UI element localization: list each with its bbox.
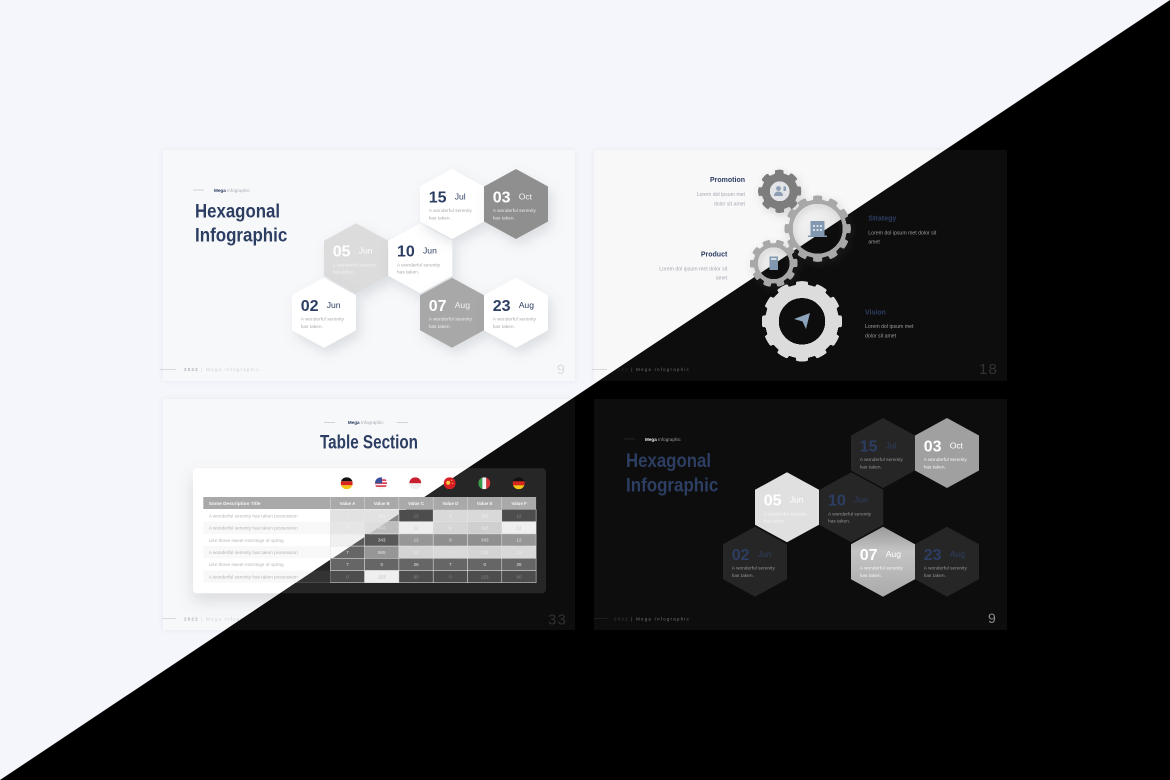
cell values: 343 [481,513,489,518]
heading: Infographic [626,474,718,496]
cell values: 90 [516,574,522,579]
hexagon 02 Jun: has taken. [301,324,323,330]
hexagon 05 Jun [324,223,388,293]
cell values: 26 [414,562,419,567]
promotion text: dolor sit amet [714,201,746,207]
hexagon 03 Oct: 03 [924,438,942,455]
hexagon 23 Aug [915,527,979,597]
slide card [163,150,575,381]
hexagon 10 Jun: has taken. [828,519,850,525]
row labels: A wonderful serenity has taken possession [209,513,298,519]
panel: light side of table slide [162,399,575,630]
hexagon 02 Jun: Jun [758,549,772,559]
cell values: 343 [378,513,386,518]
row labels: A wonderful serenity has taken possession [209,526,298,532]
cell values: 90 [414,574,419,579]
header row: Value B [374,501,390,506]
eyebrow: Mega Infographic [214,188,250,193]
hexagon 05 Jun: A wonderful serenity [764,511,807,517]
cell values [346,513,522,579]
footer: 2022 | Mega Infographic [184,367,260,372]
gear: vision [764,284,840,359]
table slide dark card [225,399,575,630]
heading: Infographic [195,225,287,247]
hexagon 03 Oct: has taken. [493,215,515,221]
hexagon 23 Aug: 23 [493,298,511,315]
cell values: 12 [414,526,419,530]
vision text [865,309,914,340]
flags row [341,477,525,489]
value cells [330,510,536,583]
hexagon 05 Jun: Jun [790,495,804,505]
hexagon 07 Aug: has taken. [860,573,882,579]
hexagon 10 Jun: A wonderful serenity [828,511,872,517]
hexagon 10 Jun [388,223,452,293]
hexagon 03 Oct: has taken. [924,464,946,470]
cell values: 343 [481,538,489,543]
hexagon 07 Aug: Aug [455,300,470,310]
flag: Indonesia [409,477,421,489]
cell values: 7 [346,550,349,555]
hexagon 07 Aug: A wonderful serenity [860,566,903,572]
gear holes light [757,203,843,280]
cell values: 0 [381,562,384,567]
header row [203,497,536,509]
header row: Value E [477,501,493,506]
table panel dark [280,468,546,594]
hexagon 15 Jul [851,418,915,488]
hexagon 03 Oct: Oct [519,191,533,201]
header row: Value F [511,501,527,506]
cell values: 7 [449,562,452,567]
hexagon 03 Oct: A wonderful serenity [924,457,967,463]
hexagon 15 Jul: has taken. [429,215,451,221]
hexagon 15 Jul: has taken. [860,464,882,470]
cell values: 12 [516,513,522,518]
table panel [188,468,467,606]
panel: dark side overlays [163,150,1007,630]
hexagon 05 Jun [755,472,819,542]
page number: 9 [557,361,565,377]
hexagon 10 Jun: Jun [854,495,868,505]
hexagon 05 Jun: 05 [333,244,351,261]
vision text: Lorem dol ipsum met [865,324,914,330]
row labels: Like those sweet mornings of spring [209,538,284,544]
gears slide footer: 2022 | Mega Infographic [614,367,690,372]
hexagon 07 Aug: 07 [429,298,447,315]
cell values: 9 [449,526,452,530]
hexagon 15 Jul: Jul [886,440,897,450]
cell values: 343 [481,550,489,555]
cell values: 12 [516,550,522,555]
heading: Hexagonal [195,200,280,222]
hexagon 10 Jun: A wonderful serenity [397,262,441,268]
header row: Value A [340,501,356,506]
flag: Italy [478,477,490,489]
hexagon 15 Jul: 15 [429,189,447,206]
hexagon 07 Aug: has taken. [429,324,451,330]
cell values: 7 [346,526,349,530]
vision text: Vision [865,309,886,316]
hexagon 10 Jun: Jun [423,246,437,256]
hexagon 05 Jun: has taken. [333,270,355,276]
cell values: 343 [378,526,386,530]
header row: Value C [408,501,425,506]
hexagon 02 Jun: A wonderful serenity [301,317,344,323]
icon: navigation arrow [794,313,810,329]
gear: promotion [761,172,799,210]
strategy text: Lorem dol ipsum met dolor sit [868,230,937,236]
vision text: dolor sit amet [865,334,897,340]
hexagon 07 Aug: Aug [886,549,901,559]
hexagon 05 Jun: has taken. [764,519,786,525]
header row: Value D [442,501,458,506]
hexagon 07 Aug: 07 [860,547,878,564]
hexagon 05 Jun: Jun [359,246,373,256]
cell values: 0 [346,574,349,579]
hexagon 02 Jun: has taken. [732,573,754,579]
cell values: 12 [414,550,419,555]
gear holes dark [761,219,842,279]
hexagon 03 Oct [915,418,979,488]
strategy text: amet [868,240,880,246]
header row: Some Description Title [209,501,261,507]
page number 33: 33 [548,611,567,628]
hexagon 07 Aug: A wonderful serenity [429,317,472,323]
flag: USA [375,477,387,489]
table [203,477,536,583]
hexagon 03 Oct [484,169,548,239]
slide card [225,399,572,630]
flag: China [444,477,456,489]
hexagon 07 Aug [851,527,915,597]
hexagon 07 Aug [420,278,484,348]
icon: calculator [770,256,778,270]
hexagon 23 Aug: has taken. [924,573,946,579]
cell values: 7 [346,513,349,518]
panel: light hexagonal slide [160,150,575,381]
promotion text [697,177,746,207]
cell values: 12 [516,526,522,530]
hexagon 23 Aug [484,278,548,348]
hexagon 02 Jun: 02 [301,298,319,315]
product text: Lorem dol ipsum met dolor sit [659,266,728,272]
slide card [598,150,945,381]
footer: 2022 | Mega Infographic [614,616,690,622]
footer: 2022 | Mega Infographic [184,616,260,622]
eyebrow: Mega Infographic [645,437,681,442]
cell values: 565 [378,550,386,555]
hexagon 10 Jun [819,472,883,542]
hexagon 15 Jul [420,169,484,239]
heading: Hexagonal [626,450,711,472]
hexagon 10 Jun: has taken. [397,270,419,276]
product text [659,252,728,282]
strategy text [868,216,937,246]
hexagon 23 Aug: Aug [519,300,534,310]
cell values: 12 [516,538,522,543]
heading: Table Section [320,433,418,454]
hexagon 02 Jun [723,527,787,597]
footer rule [592,368,607,370]
promotion text: Lorem dol ipsum met [697,192,746,198]
cell values: 0 [483,562,486,567]
cell values: 223 [481,574,489,579]
page number 18: 18 [979,361,998,378]
panel: light side of gears slide [592,150,945,381]
hexagon 23 Aug: has taken. [493,324,515,330]
cell values: 7 [449,550,452,555]
hexagon 02 Jun: Jun [327,300,341,310]
hexagon 23 Aug: A wonderful serenity [924,566,967,572]
eyebrow: Mega Infographic [348,420,384,425]
page number: 9 [988,610,996,626]
panel: dark hexagonal slide [594,399,1007,630]
cell values: 223 [378,574,386,579]
hexagon 10 Jun: 10 [397,244,415,261]
eyebrow [624,437,681,442]
hexagon 23 Aug: Aug [950,549,965,559]
cell values: 26 [516,562,522,567]
hexagon 10 Jun: 10 [828,493,846,510]
hexagon 03 Oct: 03 [493,189,511,206]
icon: person presenter [774,186,786,196]
gears [752,172,848,359]
gear: strategy [787,198,848,259]
eyebrow [324,420,408,425]
promotion text: Promotion [710,177,745,184]
hexagon 15 Jul: A wonderful serenity [429,208,472,214]
cell values: 7 [346,562,349,567]
hexagon 15 Jul: A wonderful serenity [860,457,903,463]
hexagon 02 Jun: A wonderful serenity [732,566,775,572]
cell values: 343 [378,538,386,543]
gears slide dark card [594,150,1007,381]
dark side cell overrides [296,514,400,583]
hexagon 03 Oct: A wonderful serenity [493,208,536,214]
cell values: 9 [449,513,452,518]
product text: Product [701,252,728,259]
hexagon 05 Jun: 05 [764,493,782,510]
icon: building [808,221,827,237]
hexagon 05 Jun: A wonderful serenity [333,262,376,268]
strategy text: Strategy [868,216,896,223]
hexagon 15 Jul: 15 [860,438,878,455]
product text: amet [716,276,728,282]
row labels: A wonderful serenity has taken possession [209,550,298,556]
row labels [203,513,330,583]
row labels: Like those sweet mornings of spring [209,562,284,568]
hexagon 15 Jul: Jul [455,191,466,201]
cell values: 343 [481,526,489,530]
row labels: A wonderful serenity has taken possession [209,574,298,580]
cell values: 12 [414,538,419,543]
eyebrow [193,188,250,193]
cell values: 9 [449,538,452,543]
hexagon 02 Jun: 02 [732,547,750,564]
cell values: 12 [414,513,419,518]
hexagon 02 Jun [292,278,356,348]
cell values: 0 [449,574,452,579]
hexagon 03 Oct: Oct [950,440,964,450]
gear: product [752,242,795,285]
flag: Germany [341,477,353,489]
flag: Germany [513,477,525,489]
hexagon 23 Aug: A wonderful serenity [493,317,536,323]
slide card [594,399,1007,630]
hexagon 23 Aug: 23 [924,547,942,564]
